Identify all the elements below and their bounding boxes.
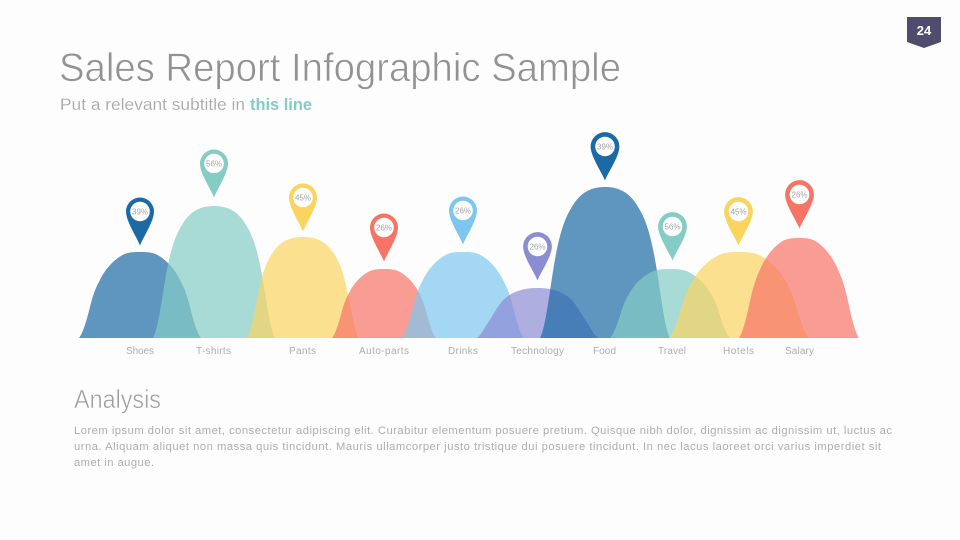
bell: Technology [477, 288, 598, 338]
subtitle [60, 96, 312, 114]
pin: Hotels 45% [724, 197, 753, 246]
pin: Travel 56% [658, 212, 687, 260]
bell: Shoes [79, 252, 201, 338]
pin: Pants 45%: 45% [295, 194, 311, 202]
pin: Food 39%: 39% [597, 142, 613, 152]
analysis heading: Analysis [74, 384, 161, 414]
pin: Food 39% [591, 132, 619, 180]
category labels: Hotels [723, 346, 754, 357]
category labels: Auto-parts [359, 346, 409, 357]
pin: Auto-parts 26%: 26% [376, 224, 392, 232]
pin: T-shirts 56%: 56% [206, 160, 222, 168]
pin: T-shirts 56% [200, 150, 228, 198]
analysis body text [74, 425, 892, 469]
pin: Salary 26%: 26% [791, 190, 808, 200]
subtitle: Put a relevant subtitle in [60, 96, 245, 114]
category labels: Salary [785, 346, 814, 357]
pin: Technology 26%: 26% [529, 242, 546, 252]
category labels: T-shirts [196, 346, 231, 357]
pin: Auto-parts 26% [370, 214, 398, 262]
category labels: Technology [511, 346, 564, 357]
pin: Salary 26% [785, 180, 814, 228]
bell: T-shirts [153, 206, 275, 338]
map pins with percentages [126, 132, 814, 280]
pin: Technology 26% [523, 232, 552, 280]
bell: Hotels [669, 252, 809, 338]
category labels: Pants [289, 346, 316, 357]
bell: Drinks [402, 252, 524, 338]
category labels [126, 346, 814, 357]
pin: Drinks 26% [449, 196, 477, 244]
bell: Travel [610, 269, 730, 338]
page number badge: 24 [917, 23, 932, 38]
category labels: Travel [658, 346, 686, 357]
subtitle: this line [250, 96, 312, 114]
bell: Auto-parts [332, 269, 436, 338]
pin: Shoes 39% [126, 198, 154, 246]
analysis body text: Lorem ipsum dolor sit amet, consectetur adipiscing elit. Curabitur elementum posuere pretium. Quisque nibh dolor, dignissim ac dignissim ut, luctus ac [74, 425, 892, 437]
bell: Pants [247, 237, 359, 338]
pin: Hotels 45%: 45% [730, 208, 747, 216]
pin: Pants 45% [289, 184, 317, 232]
category labels: Shoes [126, 346, 154, 357]
bell: Food [540, 187, 670, 338]
chart: overlapping bell curves [79, 187, 859, 338]
pin: Travel 56%: 56% [664, 222, 681, 232]
pin: Shoes 39%: 39% [132, 208, 148, 216]
page number badge [907, 17, 941, 48]
category labels: Drinks [448, 346, 478, 357]
analysis body text: amet in augue. [74, 457, 154, 469]
bell: Salary [739, 238, 859, 338]
analysis body text: urna. Aliquam aliquet non massa quis tincidunt. Mauris ullamcorper justo tristique dui posuere tincidunt. In nec lacus laoreet orci varius imperdiet sit [74, 441, 882, 453]
title: Sales Report Infographic Sample [59, 46, 621, 90]
category labels: Food [593, 346, 616, 357]
pin: Drinks 26%: 26% [455, 206, 471, 216]
